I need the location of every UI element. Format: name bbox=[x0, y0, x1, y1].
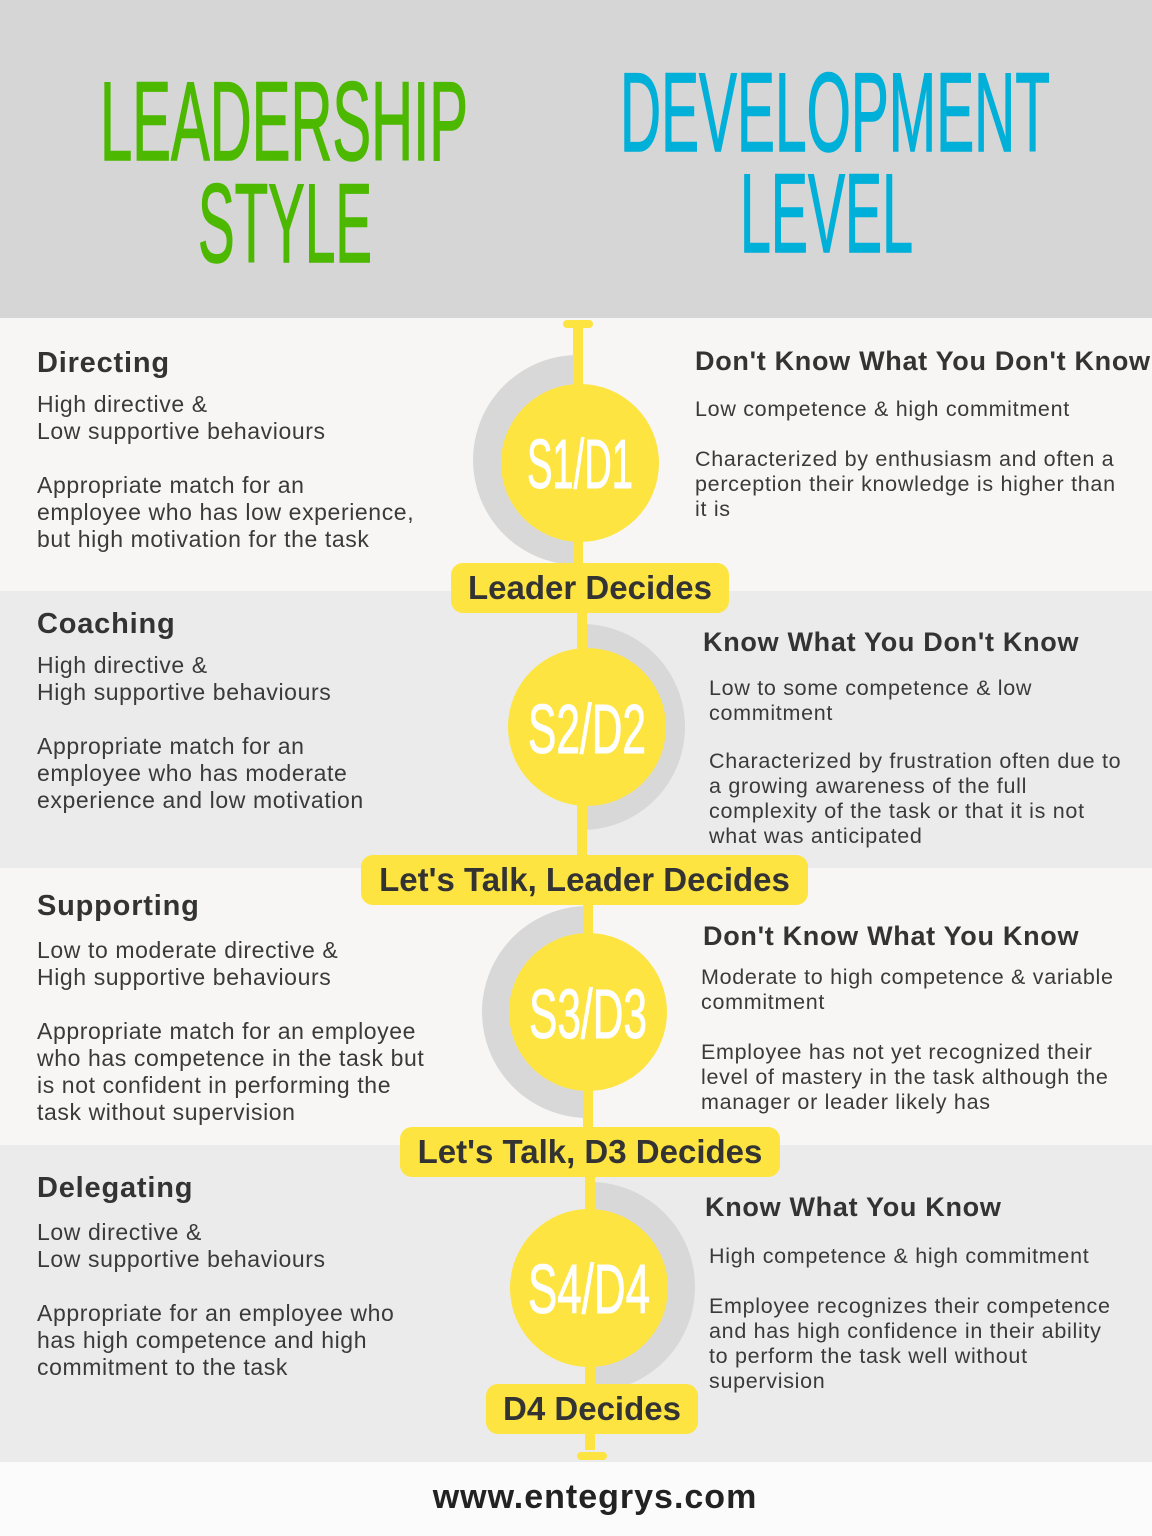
panel: D2: Low to some competence & low bbox=[709, 676, 1032, 700]
panel: D4: Employee recognizes their competence bbox=[709, 1294, 1111, 1318]
panel: directing: High directive & bbox=[37, 391, 208, 417]
panel: D1: Characterized by enthusiasm and often a bbox=[695, 447, 1114, 471]
panel: supporting: Supporting bbox=[37, 890, 200, 922]
panel: directing: but high motivation for the task bbox=[37, 526, 369, 552]
panel: delegating: Appropriate for an employee who bbox=[37, 1300, 394, 1326]
panel: directing: Appropriate match for an bbox=[37, 472, 305, 498]
panel: supporting: task without supervision bbox=[37, 1099, 296, 1125]
panel: delegating bbox=[37, 1172, 394, 1380]
panel: D2: complexity of the task or that it is not bbox=[709, 799, 1085, 823]
title: LEADERSHIP bbox=[100, 59, 468, 184]
panel: D2 bbox=[703, 627, 1121, 848]
panel: D2: what was anticipated bbox=[709, 824, 923, 848]
panel: D2: a growing awareness of the full bbox=[709, 774, 1027, 798]
panel: delegating: Delegating bbox=[37, 1172, 193, 1204]
panel: D4: High competence & high commitment bbox=[709, 1244, 1089, 1268]
timeline: S3/D3 bbox=[529, 975, 647, 1053]
panel: coaching: Appropriate match for an bbox=[37, 733, 305, 759]
panel: D3: manager or leader likely has bbox=[701, 1090, 991, 1114]
label: leader decides bbox=[451, 563, 729, 613]
panel: coaching: employee who has moderate bbox=[37, 760, 347, 786]
title: STYLE bbox=[198, 161, 372, 286]
panel: D1: Low competence & high commitment bbox=[695, 397, 1070, 421]
panel: delegating: Low supportive behaviours bbox=[37, 1246, 326, 1272]
label: leader decides: Leader Decides bbox=[468, 569, 712, 606]
panel: D1: it is bbox=[695, 497, 731, 521]
panel: D3 bbox=[701, 921, 1114, 1114]
panel: D4 bbox=[705, 1192, 1111, 1393]
panel: supporting bbox=[37, 890, 424, 1125]
panel: directing bbox=[37, 347, 414, 552]
panel: directing: Directing bbox=[37, 347, 170, 379]
panel: supporting: High supportive behaviours bbox=[37, 964, 331, 990]
timeline: S1/D1 bbox=[527, 425, 633, 503]
panel: delegating: Low directive & bbox=[37, 1219, 202, 1245]
panel: D4: to perform the task well without bbox=[709, 1344, 1028, 1368]
panel: coaching: Coaching bbox=[37, 608, 176, 640]
panel: D1 bbox=[695, 346, 1151, 521]
panel: D3: Don't Know What You Know bbox=[703, 921, 1079, 951]
panel: D2: Know What You Don't Know bbox=[703, 627, 1079, 657]
panel: D3: level of mastery in the task although the bbox=[701, 1065, 1109, 1089]
label: d4 decides bbox=[486, 1384, 698, 1434]
title: LEVEL bbox=[740, 151, 913, 276]
panel: D3: commitment bbox=[701, 990, 825, 1014]
panel: coaching: experience and low motivation bbox=[37, 787, 364, 813]
panel: D4: and has high confidence in their ability bbox=[709, 1319, 1102, 1343]
panel: D1: Don't Know What You Don't Know bbox=[695, 346, 1151, 376]
panel: D4: supervision bbox=[709, 1369, 825, 1393]
timeline: S4/D4 bbox=[528, 1250, 650, 1328]
panel: supporting: Low to moderate directive & bbox=[37, 937, 338, 963]
panel: coaching: High directive & bbox=[37, 652, 208, 678]
panel: delegating: commitment to the task bbox=[37, 1354, 288, 1380]
label: d4 decides: D4 Decides bbox=[503, 1390, 681, 1427]
panel: supporting: who has competence in the task but bbox=[37, 1045, 424, 1071]
label: lets talk leader decides bbox=[361, 855, 808, 905]
panel: delegating: has high competence and high bbox=[37, 1327, 367, 1353]
panel: D4: Know What You Know bbox=[705, 1192, 1002, 1222]
panel: D2: Characterized by frustration often due to bbox=[709, 749, 1121, 773]
panel: coaching bbox=[37, 608, 364, 813]
panel: coaching: High supportive behaviours bbox=[37, 679, 331, 705]
footer url: www.entegrys.com bbox=[433, 1478, 757, 1516]
label: lets talk leader decides: Let's Talk, Leader Decides bbox=[379, 861, 790, 898]
panel: supporting: Appropriate match for an employee bbox=[37, 1018, 416, 1044]
label: lets talk d3 decides bbox=[400, 1127, 780, 1177]
timeline: S2/D2 bbox=[528, 690, 646, 768]
label: lets talk d3 decides: Let's Talk, D3 Decides bbox=[418, 1133, 762, 1170]
panel: directing: Low supportive behaviours bbox=[37, 418, 326, 444]
panel: supporting: is not confident in performing the bbox=[37, 1072, 391, 1098]
panel: D3: Moderate to high competence & variable bbox=[701, 965, 1114, 989]
panel: D1: perception their knowledge is higher than bbox=[695, 472, 1116, 496]
panel: directing: employee who has low experience, bbox=[37, 499, 414, 525]
panel: D2: commitment bbox=[709, 701, 833, 725]
panel: D3: Employee has not yet recognized their bbox=[701, 1040, 1093, 1064]
title bbox=[100, 50, 1050, 286]
